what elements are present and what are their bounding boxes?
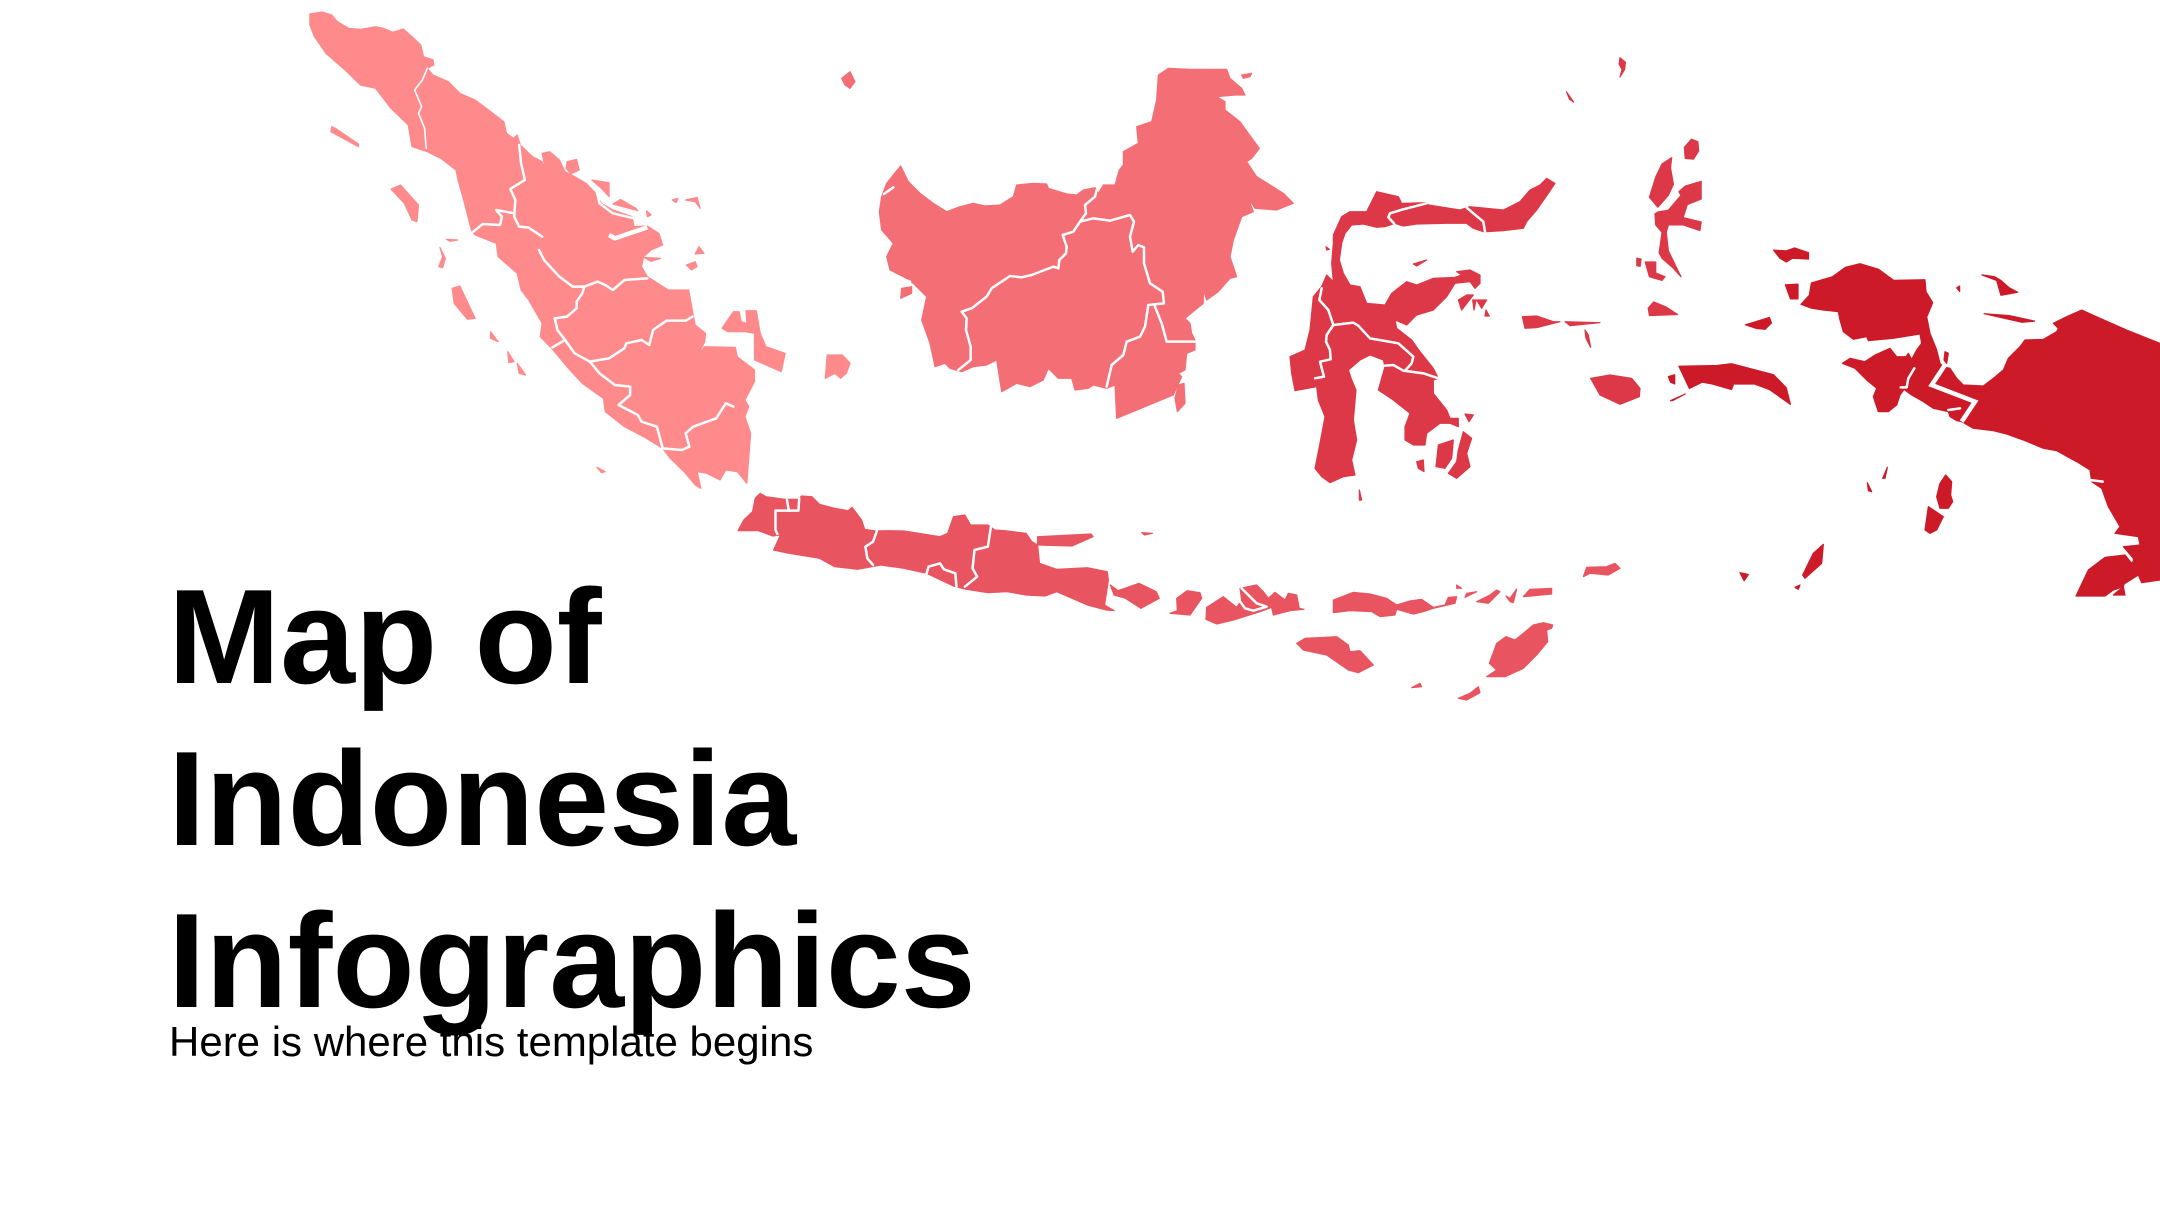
title [168, 561, 976, 1036]
region: Kalimantan [842, 68, 1293, 418]
subtitle: Here is where this template begins [169, 1018, 813, 1065]
title: Infographics [168, 885, 976, 1036]
region: Sumatra [310, 12, 850, 488]
region: Papua [1795, 264, 2160, 596]
title: Map of [168, 561, 602, 712]
region: Maluku islands and Raja Ampat [1668, 248, 2035, 581]
region: North Maluku [1567, 58, 1701, 316]
title: Indonesia [168, 723, 796, 874]
region: Lesser Sunda Islands [1170, 563, 1620, 700]
region: Java and Bali [738, 493, 1159, 611]
region: Sulawesi [1290, 178, 1640, 500]
